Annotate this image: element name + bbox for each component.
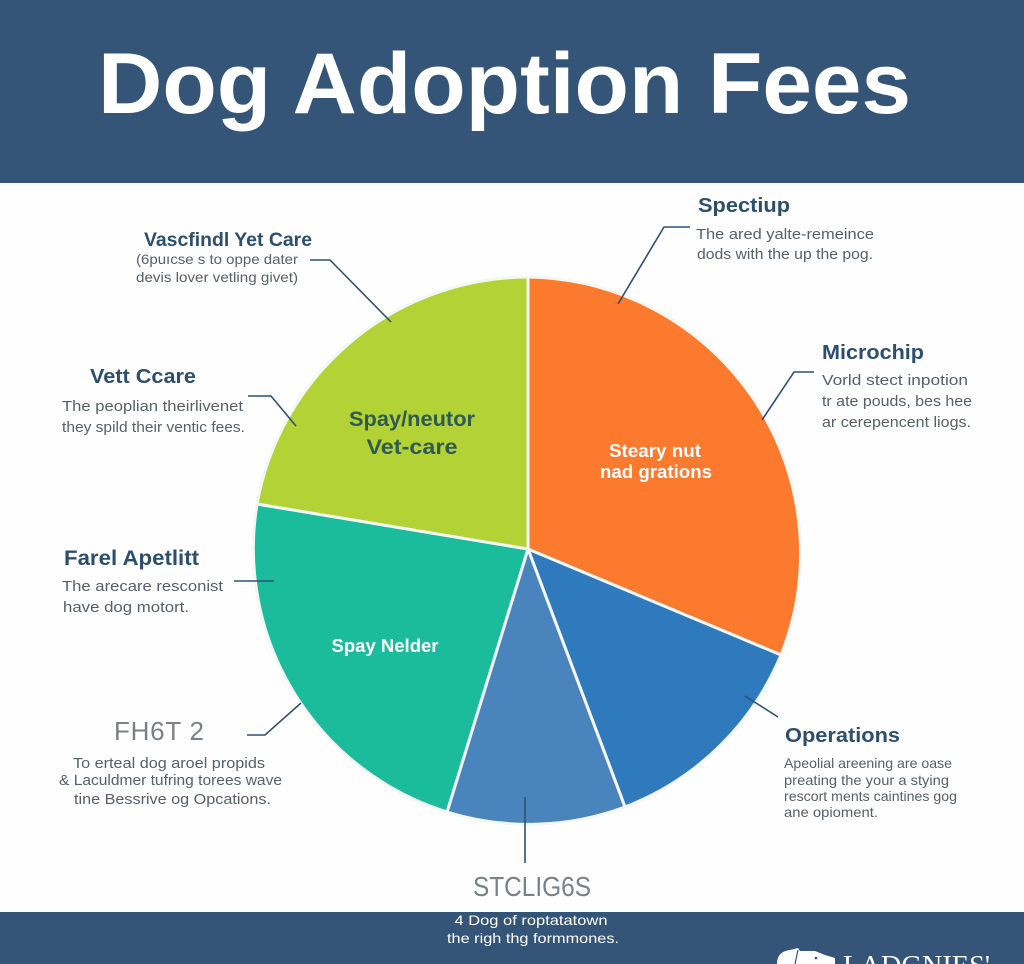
footer band	[0, 912, 1024, 964]
callout: Operations: Operations	[785, 725, 900, 747]
callout: Vascfindl Yet Care: (6puıcse s to oppe dater	[136, 251, 298, 267]
pie chart	[253, 277, 801, 824]
callout: Farel Apetlitt: Farel Apetlitt	[64, 547, 199, 570]
slice label: orange: Steary nut	[609, 441, 701, 461]
callout: FH6T 2: To erteal dog aroel propids	[73, 755, 265, 772]
callout: Microchip: ar cerepencent liogs.	[822, 414, 971, 431]
slice label: teal: Spay Nelder	[332, 636, 438, 656]
callout: FH6T 2: FH6T 2	[114, 716, 204, 746]
callout: Operations: Apeolial areening are oase	[784, 755, 952, 771]
callout: Farel Apetlitt: The arecare resconist	[62, 578, 224, 595]
callout: Stclig6s	[473, 797, 591, 902]
slice label: orange line 2: nad grations	[600, 462, 712, 482]
slice: lime	[257, 277, 528, 549]
footer band: the righ thg formmones.	[447, 930, 619, 946]
callout: Vascfindl Yet Care	[136, 230, 391, 322]
callout: Farel Apetlitt: have dog motort.	[63, 599, 189, 616]
title: Dog Adoption Fees	[98, 36, 911, 132]
callout: Spectiup: dods with the up the pog.	[697, 246, 873, 263]
callout: FH6T 2	[59, 703, 301, 808]
callout: Farel Apetlitt	[62, 547, 274, 616]
callout: Operations: ane opioment.	[784, 804, 878, 820]
callout: Vascfindl Yet Care: Vascfindl Yet Care	[144, 230, 312, 251]
callout: Vett Ccare: Vett Ccare	[90, 366, 196, 388]
slice: teal	[253, 504, 528, 812]
callout: Microchip	[762, 342, 972, 431]
callout: Spectiup	[618, 195, 874, 304]
callout: Operations: preating the your a stying	[784, 772, 949, 788]
icon: dog logo	[777, 948, 835, 964]
callout: Operations: rescort ments caintines gog	[784, 788, 957, 804]
callout: Vett Ccare	[62, 366, 296, 436]
callout: Microchip: Vorld stect inpotion	[822, 372, 968, 389]
callout: Vett Ccare: they spild their ventic fees.	[62, 419, 245, 436]
callout: Spectiup: The ared yalte-remeince	[696, 226, 874, 243]
callout: Microchip: tr ate pouds, bes hee	[822, 393, 972, 410]
slice label: lime line 2: Vet-care	[366, 436, 458, 459]
callout: Stclig6s: STCLIG6S	[473, 871, 591, 902]
slice: orange	[528, 277, 801, 655]
slice: blue	[528, 549, 781, 807]
footer text: 4 Dog of roptatatown	[454, 912, 608, 928]
slice: medium blue	[447, 549, 625, 824]
callout: Microchip: Microchip	[822, 342, 924, 364]
callout: Vett Ccare: The peoplian theirlivenet	[62, 398, 244, 415]
callout: Vascfindl Yet Care: devis lover vetling givet)	[136, 269, 298, 285]
callout: FH6T 2: & Laculdmer tufring torees wave	[59, 772, 282, 789]
callout: Operations	[745, 696, 957, 820]
header band	[0, 0, 1024, 183]
callout: Spectiup: Spectiup	[698, 195, 790, 217]
callout: FH6T 2: tine Bessrive og Opcations.	[74, 791, 271, 808]
slice label: lime: Spay/neutor	[349, 408, 475, 431]
